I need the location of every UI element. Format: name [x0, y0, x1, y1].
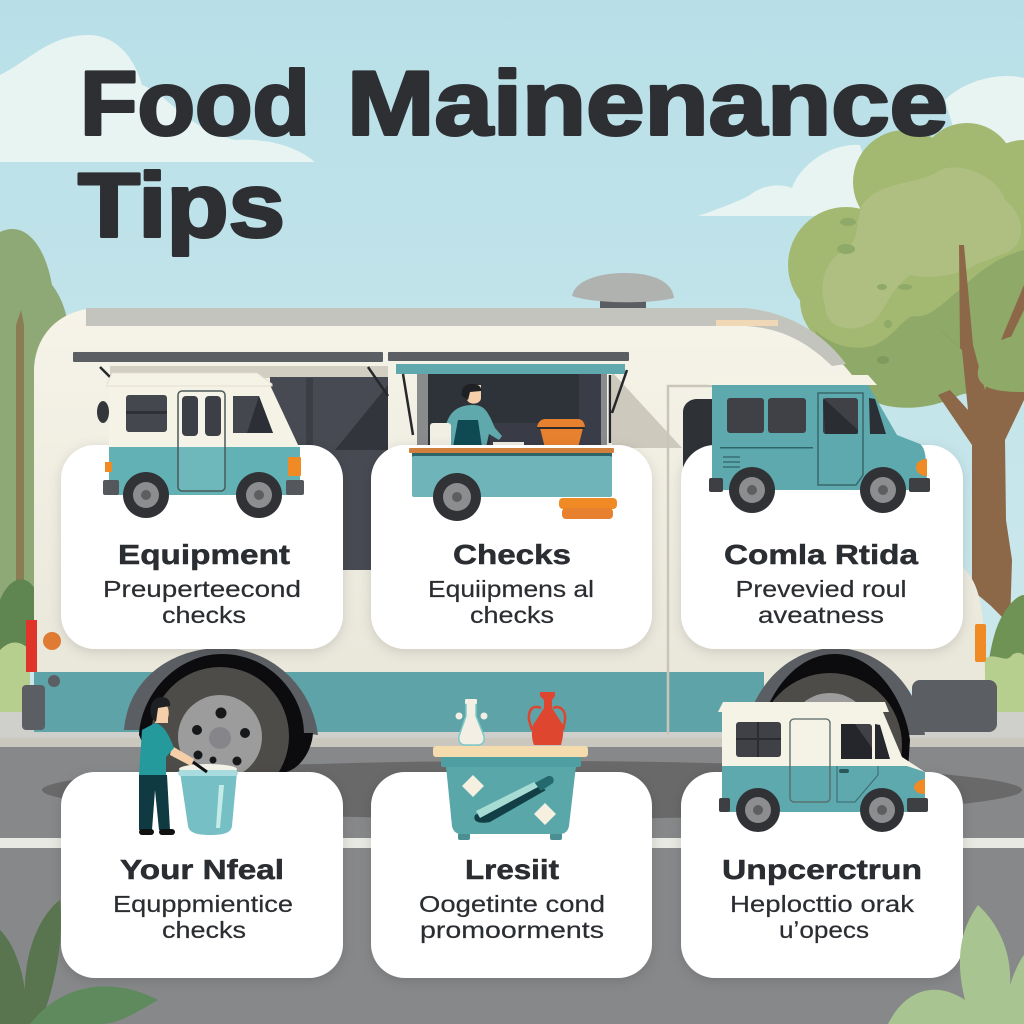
- rear wheel: [124, 648, 318, 805]
- card: Lresiit: Oogetinte cond: [419, 891, 605, 917]
- card: Your Nfeal: Equppmientice: [113, 891, 293, 917]
- title: [78, 54, 948, 256]
- sky background: [0, 0, 1024, 720]
- card: Unpcerctrun: Heplocttio orak: [730, 891, 915, 917]
- card: Your Nfeal: [61, 772, 343, 978]
- card: Unpcerctrun: Unpcerctrun: [722, 854, 922, 885]
- teal stripe: [34, 672, 764, 732]
- shadow under awnings: [110, 366, 388, 378]
- card: Comla Rtida: Comla Rtida: [724, 539, 918, 570]
- card: Checks: Checks: [453, 539, 571, 570]
- left background trees: [0, 229, 68, 712]
- rear door: [668, 386, 712, 735]
- awnings: [73, 352, 383, 362]
- card: Equipment: checks: [162, 602, 246, 628]
- card: Lresiit: promoorments: [420, 917, 604, 943]
- card: Comla Rtida: Prevevied roul: [736, 576, 906, 602]
- truck shell: [34, 308, 985, 690]
- ground and road: [0, 712, 1024, 1024]
- title: Mainenance: [347, 54, 948, 154]
- card: Checks: checks: [470, 602, 554, 628]
- vendor: [446, 384, 502, 447]
- title: Food: [80, 54, 310, 154]
- trunk: [918, 245, 1024, 625]
- card: Equipment: [61, 445, 343, 649]
- card: Equipment: Preuperteecond: [103, 576, 301, 602]
- card: Unpcerctrun: uʼopecs: [779, 917, 869, 943]
- icon: small service van: [718, 702, 928, 832]
- icon: teal van: [708, 375, 930, 513]
- canopy: [788, 123, 1024, 350]
- front wheel: [745, 648, 925, 817]
- side window: [270, 377, 388, 570]
- icon: cream and teal van: [97, 373, 304, 518]
- card: Your Nfeal: checks: [162, 917, 246, 943]
- food truck body: [22, 273, 997, 817]
- card: Equipment: Equipment: [118, 539, 290, 570]
- red jug: [529, 692, 565, 745]
- card: Unpcerctrun: [681, 772, 963, 978]
- card: Lresiit: Lresiit: [465, 854, 559, 885]
- icon: person with bucket: [139, 697, 238, 835]
- card: Your Nfeal: Your Nfeal: [120, 854, 284, 885]
- icon: food cart counter: [409, 448, 617, 521]
- icon: bottles and tool bin: [433, 692, 588, 840]
- service window with vendor: [417, 374, 607, 448]
- bottle: [456, 699, 488, 745]
- right tree: [788, 123, 1024, 712]
- foreground leaves left: [0, 900, 158, 1024]
- clouds: [0, 35, 1024, 216]
- foreground leaves right: [888, 905, 1024, 1024]
- roof rail: [86, 308, 846, 366]
- card: Checks: Equiipmens al: [428, 576, 594, 602]
- card: Checks: [371, 445, 652, 649]
- card: Comla Rtida: aveatness: [758, 602, 884, 628]
- card: Lresiit: [371, 772, 652, 978]
- title: Tips: [78, 156, 285, 256]
- card: Comla Rtida: [681, 445, 963, 649]
- bumpers and lights: [912, 680, 997, 732]
- roof vent: [572, 273, 674, 310]
